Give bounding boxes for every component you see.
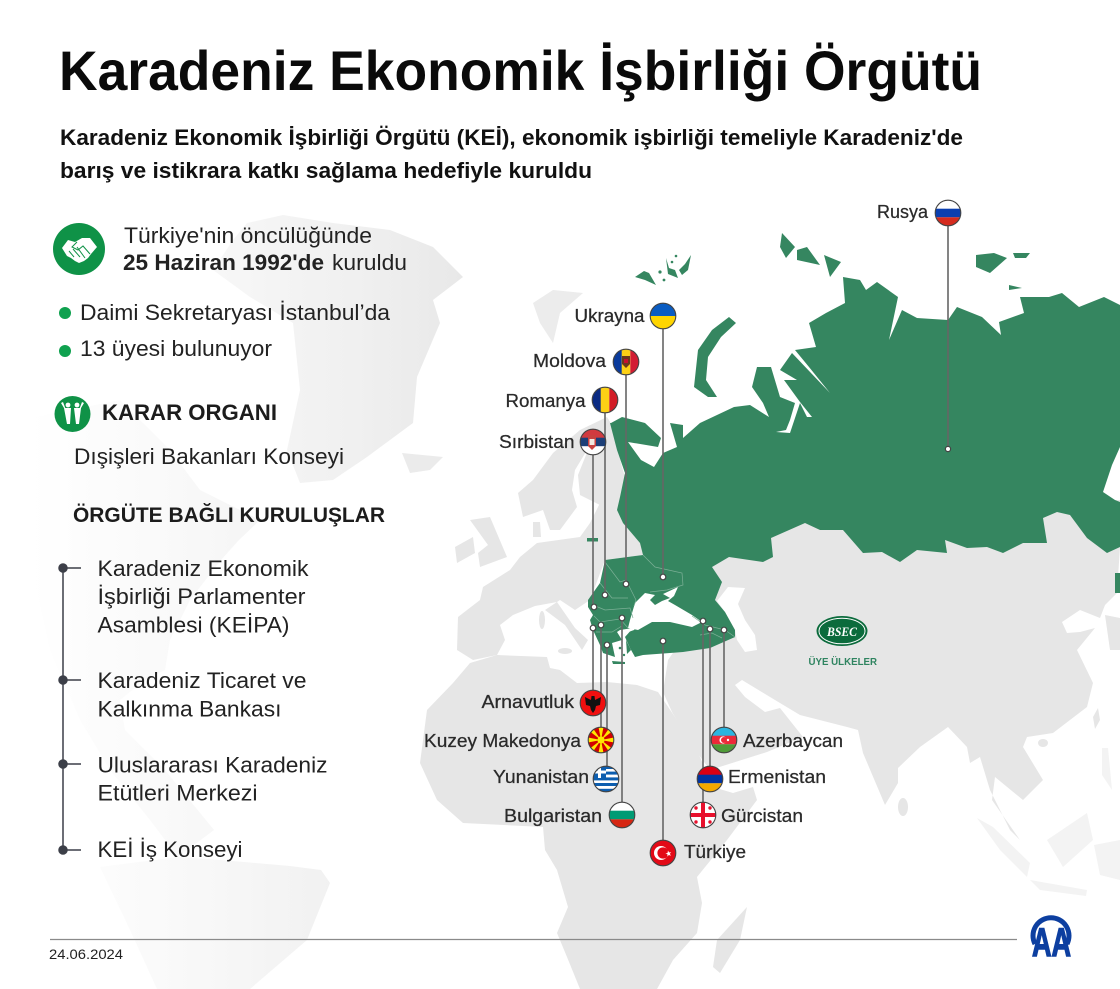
pin: Ukrayna: Ukrayna — [574, 306, 646, 326]
pin: Bulgaristan: Bulgaristan — [504, 806, 602, 826]
pin: Moldova: Moldova — [533, 351, 607, 371]
AA logo — [1032, 918, 1071, 965]
pin: Gürcistan — [690, 618, 803, 828]
timeline of institutions — [59, 556, 328, 862]
heading: karar organı: KARAR ORGANI — [102, 400, 277, 425]
bullet list: Daimi Sekretaryası İstanbul’da — [80, 300, 391, 325]
pin: Ukrayna — [574, 303, 676, 580]
icon: decision body people — [54, 396, 90, 432]
icon: handshake — [53, 223, 105, 275]
pin: Azerbaycan — [711, 627, 843, 753]
pin: Rusya — [877, 200, 961, 452]
pin: Gürcistan: Gürcistan — [721, 806, 803, 826]
timeline of institutions: KEİ İş Konseyi — [98, 837, 242, 862]
pin: Yunanistan: Yunanistan — [493, 767, 589, 787]
pin: Ermenistan: Ermenistan — [728, 767, 826, 787]
pin: Türkiye: Türkiye — [684, 842, 746, 862]
text: council: Dışişleri Bakanları Konseyi — [74, 444, 344, 469]
pin: Türkiye — [650, 638, 746, 866]
pin: Moldova — [533, 349, 639, 587]
BSEC logo and legend: BSEC — [826, 624, 857, 639]
pin: Kuzey Makedonya: Kuzey Makedonya — [424, 731, 582, 751]
pin: Yunanistan — [493, 642, 619, 792]
pin: Romanya — [506, 387, 618, 598]
timeline of institutions: İşbirliği Parlamenter — [98, 584, 306, 609]
pin: Azerbaycan: Azerbaycan — [743, 731, 843, 751]
timeline of institutions: Asamblesi (KEİPA) — [98, 612, 290, 638]
timeline of institutions: Etütleri Merkezi — [98, 780, 258, 806]
founding text: 25 Haziran 1992'de — [123, 250, 324, 275]
pin: Kuzey Makedonya — [424, 622, 614, 753]
BSEC logo and legend — [808, 616, 877, 668]
timeline of institutions: Kalkınma Bankası — [98, 696, 282, 722]
pin: Arnavutluk: Arnavutluk — [482, 692, 575, 712]
date: 24.06.2024 — [49, 947, 124, 962]
pin: Sırbistan — [499, 429, 606, 610]
timeline of institutions: Karadeniz Ekonomik — [98, 556, 310, 581]
subtitle: barış ve istikrara katkı sağlama hedefiyle kuruldu — [60, 158, 592, 183]
pin: Romanya: Romanya — [506, 391, 587, 411]
pin: Arnavutluk — [482, 625, 606, 716]
founding text: kuruldu — [332, 250, 407, 275]
BSEC logo and legend: ÜYE ÜLKELER — [808, 655, 877, 668]
timeline of institutions: Uluslararası Karadeniz — [98, 752, 328, 778]
title: Karadeniz Ekonomik İşbirliği Örgütü — [59, 39, 982, 102]
AA logo: AA — [1032, 921, 1071, 965]
pin: Ermenistan — [697, 626, 826, 792]
founding text — [123, 223, 407, 275]
heading: affiliated institutions: ÖRGÜTE BAĞLI KURULUŞLAR — [73, 503, 385, 527]
member states map (green) — [587, 233, 1120, 664]
subtitle: Karadeniz Ekonomik İşbirliği Örgütü (KEİ), ekonomik işbirliği temeliyle Karadeniz'de — [60, 125, 963, 150]
world map background — [20, 215, 1120, 989]
pin: Bulgaristan — [504, 615, 635, 828]
bullet list: 13 üyesi bulunuyor — [80, 336, 272, 361]
founding text: Türkiye'nin öncülüğünde — [124, 223, 372, 248]
pin: Sırbistan: Sırbistan — [499, 432, 574, 452]
footer rule — [50, 938, 1017, 940]
bullet list — [59, 300, 391, 361]
timeline of institutions: Karadeniz Ticaret ve — [98, 668, 306, 693]
black sea — [628, 587, 702, 630]
subtitle — [60, 125, 963, 183]
pin: Rusya: Rusya — [877, 202, 929, 222]
